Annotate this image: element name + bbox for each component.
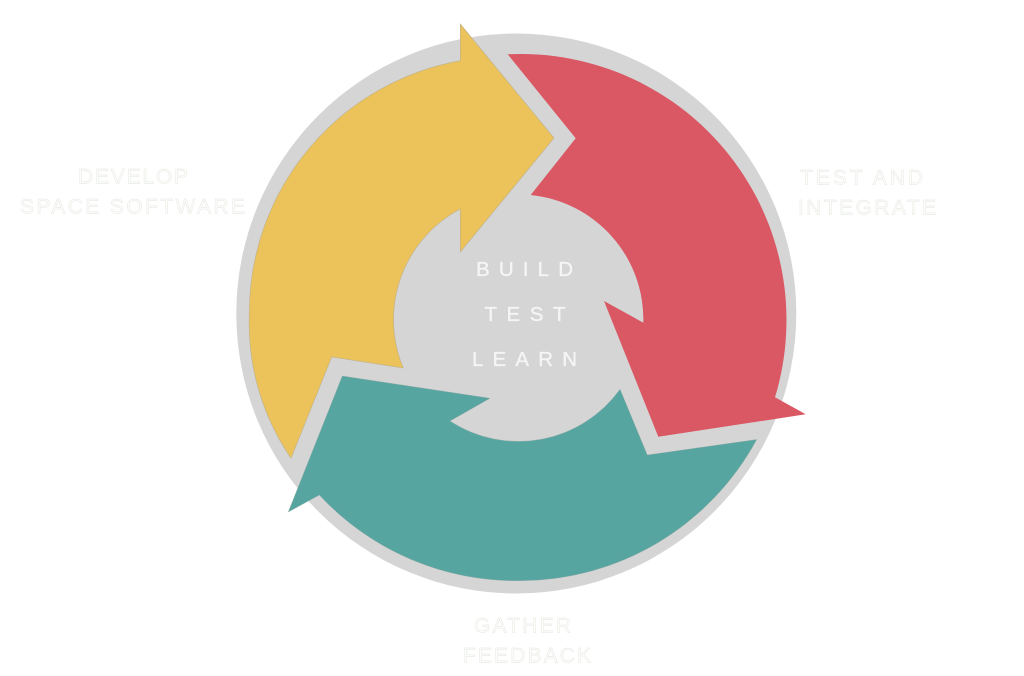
arrow: develop (yellow) bbox=[249, 24, 554, 458]
label: develop space software bbox=[20, 166, 245, 218]
label: develop space software: DEVELOP bbox=[78, 166, 188, 188]
centre text: build test learn: LEARN bbox=[472, 348, 577, 371]
arrow: gather feedback (teal) bbox=[288, 376, 757, 581]
background grey circle bbox=[236, 34, 796, 594]
label: test and integrate bbox=[798, 166, 936, 220]
label: gather feedback bbox=[463, 614, 591, 668]
centre text: build test learn: TEST bbox=[484, 303, 566, 326]
centre text: build test learn: BUILD bbox=[476, 258, 573, 281]
label: gather feedback: GATHER bbox=[474, 614, 571, 638]
label: gather feedback: FEEDBACK bbox=[463, 644, 591, 668]
arrow: test and integrate (red) bbox=[508, 54, 806, 437]
label: test and integrate: TEST AND bbox=[800, 166, 923, 190]
centre text: build test learn bbox=[472, 258, 577, 371]
label: test and integrate: INTEGRATE bbox=[798, 196, 936, 220]
label: develop space software: SPACE SOFTWARE bbox=[20, 196, 245, 218]
